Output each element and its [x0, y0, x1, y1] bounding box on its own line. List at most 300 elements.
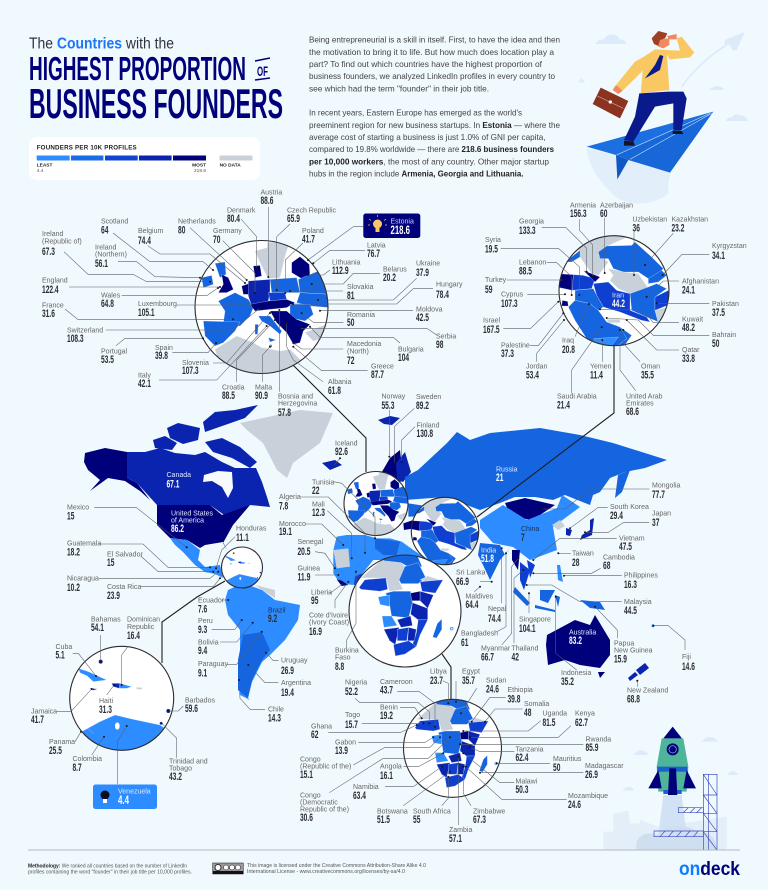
label: Liberia: Liberia	[311, 590, 332, 596]
exhaust	[658, 795, 687, 835]
label: Cote d'Ivoire (Ivory Coast)	[309, 612, 349, 638]
label: Maldives: 64.4	[466, 599, 479, 611]
label: Singapore: Singapore	[519, 616, 551, 624]
label: Albania	[328, 379, 351, 397]
label: Greece: 87.7	[371, 369, 384, 381]
label: Palestine: 37.3	[501, 348, 514, 360]
intro text: see which had the term "founder" in their job title.	[309, 84, 489, 94]
label: Bangladesh	[461, 630, 498, 649]
label: Cyprus	[501, 292, 524, 310]
label: Syria: 19.5	[485, 244, 498, 256]
footer rule	[28, 850, 740, 851]
label: Jamaica: Jamaica	[31, 708, 57, 716]
label: Ukraine: 37.9	[416, 267, 429, 279]
label: Uganda: 81.5	[542, 717, 555, 729]
label: Sweden: Sweden	[416, 394, 441, 401]
label: Maldives: Maldives	[466, 594, 494, 600]
label: China: 7	[521, 532, 525, 544]
illustration: rocket launch	[603, 727, 738, 850]
label: Croatia: 88.5	[222, 390, 235, 402]
label: Senegal	[298, 539, 324, 558]
title: The Countries with the	[29, 36, 174, 52]
label: Belarus	[383, 266, 407, 284]
clouds	[623, 737, 738, 791]
trousers	[624, 92, 687, 142]
label: Italy: Italy	[138, 372, 151, 380]
label: France	[42, 302, 64, 320]
small lens: Middle East	[410, 496, 482, 569]
label: Ethiopia	[508, 687, 533, 706]
label: Colombia: Colombia	[72, 756, 102, 763]
label: Cameroon: 43.7	[380, 684, 393, 696]
label: India	[481, 548, 496, 565]
label: Nepal	[488, 606, 507, 625]
label: Pakistan: Pakistan	[712, 301, 739, 308]
label: Mexico: 15	[67, 510, 74, 522]
label: Pakistan	[712, 301, 739, 319]
label: Trinidad and Tobago: 43.2	[169, 771, 182, 783]
label: Paraguay: 9.1	[198, 668, 207, 680]
connectors between lenses	[162, 345, 614, 699]
label: Fiji	[682, 654, 695, 673]
label: Morocco: Morocco	[279, 521, 306, 528]
label: Namibia	[353, 784, 379, 802]
label: Wales	[101, 292, 121, 310]
label: Sudan: 24.6	[486, 684, 499, 696]
label: Angola	[380, 764, 402, 782]
label: Dominican Republic: 16.4	[127, 630, 140, 642]
label: Tanzania: Tanzania	[516, 746, 544, 754]
legend card: 218.6	[194, 168, 206, 174]
label: Fiji: Fiji	[682, 654, 691, 661]
label: Turkey: Turkey	[485, 277, 507, 284]
label: Denmark: Denmark	[227, 208, 256, 214]
label: Nigeria	[345, 680, 367, 698]
label: Lithuania: 112.9	[332, 265, 349, 277]
label: Bolivia: Bolivia	[198, 640, 219, 646]
label: Bangladesh: 61	[461, 637, 468, 649]
icon: briefcase	[593, 88, 628, 118]
label: Kyrgyzstan: 34.1	[712, 250, 725, 262]
label: Norway	[382, 394, 406, 412]
paper plane	[587, 112, 713, 179]
label: Turkey: 59	[485, 284, 492, 296]
label: Cuba: 5.1	[56, 650, 65, 662]
label: Latvia: Latvia	[367, 242, 386, 250]
label: Mexico	[67, 504, 89, 522]
label: Mozambique	[568, 793, 608, 811]
label: Lebanon: Lebanon	[519, 260, 546, 266]
label: Israel	[483, 318, 501, 336]
methodology note	[28, 864, 192, 876]
label: Poland: Poland	[302, 228, 324, 235]
label: Trinidad and Tobago: Tobago	[169, 766, 192, 772]
intro text: compared to 19.8% worldwide — there are 218.6 business founders	[309, 144, 554, 154]
label: United Arab Emirates	[626, 394, 663, 418]
label: Greece	[371, 364, 394, 381]
label: Jamaica	[31, 708, 57, 726]
label: Qatar: Qatar	[682, 347, 700, 354]
label: Algeria: Algeria	[279, 494, 301, 501]
label: Namibia: Namibia	[353, 784, 379, 791]
label: Russia: Russia	[496, 466, 518, 474]
label: Germany: Germany	[213, 228, 242, 235]
intro text	[309, 34, 560, 178]
label: Kenya	[575, 710, 595, 729]
label: Jamaica: 41.7	[31, 714, 44, 726]
label: Sweden	[416, 394, 441, 412]
label: Tunisia: Tunisia	[312, 480, 334, 486]
label: Papua New Guinea: Papua	[614, 640, 634, 648]
label: United States of America	[171, 510, 214, 535]
label: Lebanon: 88.5	[519, 266, 532, 278]
label: Netherlands	[178, 218, 216, 237]
intro text: average cost of starting a business is just 1.0% of GNI per capita,	[309, 132, 546, 142]
label: Czech Republic	[287, 208, 337, 225]
label: Serbia	[436, 334, 456, 351]
label: Argentina: 19.4	[281, 687, 294, 699]
label: Kyrgyzstan: Kyrgyzstan	[712, 243, 747, 250]
label: Poland	[302, 228, 324, 246]
label: Ghana	[311, 724, 332, 741]
label: Moldova	[416, 306, 443, 324]
label: Benin: Benin	[380, 704, 398, 712]
label: Jordan: Jordan	[526, 364, 548, 370]
label: Oman: 35.5	[641, 370, 654, 382]
label: Switzerland: 108.3	[67, 333, 84, 345]
small lens: Europe	[344, 472, 409, 537]
label: Uruguay: 26.9	[281, 665, 294, 677]
label: Algeria: 7.8	[279, 500, 288, 512]
license text: This image is licensed under the Creative Commons Attribution-Share Alike 4.0	[247, 863, 426, 869]
label: Iraq: 20.8	[562, 344, 575, 356]
label: Papua New Guinea	[614, 640, 653, 666]
label: Kazakhstan: Kazakhstan	[672, 216, 708, 224]
Greenland	[240, 410, 333, 478]
label: Serbia: 98	[436, 339, 443, 351]
icon: light bulb	[368, 215, 387, 232]
label: Indonesia: 35.2	[561, 676, 574, 688]
lens: Africa	[404, 698, 502, 797]
title: HIGHEST PROPORTION	[29, 51, 246, 88]
label: Georgia: Georgia	[519, 218, 544, 226]
label: Armenia: 156.3	[570, 208, 587, 220]
legend card: MOST	[192, 162, 206, 168]
label: Togo: Togo	[345, 712, 360, 719]
label: Scotland: Scotland	[101, 218, 128, 226]
label: Ireland (Northern): (Northern)	[95, 252, 127, 258]
label: Qatar: 33.8	[682, 353, 695, 365]
label: Lebanon	[519, 260, 546, 278]
South East Asia	[512, 550, 605, 612]
label: Slovakia	[347, 284, 374, 302]
label: Afghanistan: 24.1	[682, 285, 695, 297]
title	[29, 36, 283, 127]
label: Guatemala: Guatemala	[67, 540, 101, 548]
label: Ukraine: Ukraine	[416, 260, 440, 268]
label: South Korea: South Korea	[610, 504, 649, 511]
label: Cote d'Ivoire (Ivory Coast): 16.9	[309, 626, 322, 638]
label: Nicaragua: 10.2	[67, 582, 80, 594]
label: Ireland (Northern)	[95, 244, 127, 270]
label: United States of America: 86.2	[171, 523, 184, 535]
label: Chile: Chile	[268, 706, 284, 714]
label: Congo (Democratic Republic of the): Congo	[300, 792, 321, 800]
label: Zimbabwe	[473, 808, 505, 826]
intro text: the motivation to bring it to life. But how much does location play a	[309, 47, 554, 57]
methodology note: profiles containing the word "founder" in their job title per 10,000 profiles.	[28, 870, 192, 876]
label: Myanmar	[481, 646, 511, 664]
Japan	[580, 518, 594, 540]
label: Congo (Democratic Republic of the): 30.6	[300, 812, 313, 824]
label: Madagascar: Madagascar	[585, 763, 624, 770]
icon: light bulb	[100, 790, 110, 803]
label: Slovenia: Slovenia	[182, 360, 209, 367]
label: Congo (Democratic Republic of the): Republic of the)	[300, 806, 349, 814]
label: Guinea: Guinea	[298, 566, 320, 572]
label: Russia: 21	[496, 472, 503, 484]
Koreas	[552, 520, 572, 536]
label: Indonesia: Indonesia	[561, 670, 591, 677]
city skyline	[603, 811, 727, 850]
label: Nicaragua	[67, 576, 99, 594]
label: Uruguay	[281, 658, 308, 677]
label: Cyprus: Cyprus	[501, 292, 524, 298]
label: El Salvador: 15	[107, 557, 114, 569]
label: Thailand	[512, 646, 538, 664]
label: Israel: 167.5	[483, 324, 500, 336]
label: Nicaragua: Nicaragua	[67, 576, 99, 582]
label: Slovenia: 107.3	[182, 365, 199, 377]
label: Myanmar: 66.7	[481, 652, 494, 664]
label: Latvia	[367, 242, 386, 260]
label: El Salvador	[107, 552, 143, 569]
label: Taiwan: Taiwan	[572, 550, 594, 558]
label: Bahamas	[91, 616, 121, 634]
label: Cuba: Cuba	[56, 644, 72, 651]
intro text: hubs in the region include Armenia, Georgia and Lithuania.	[309, 168, 524, 178]
label: Macedonia (North): 72	[347, 355, 354, 367]
label: Fiji: 14.6	[682, 661, 695, 673]
label: Azerbaijan: 60	[600, 208, 607, 220]
label: Bahrain: Bahrain	[712, 332, 736, 339]
label: Papua New Guinea: 15.9	[614, 654, 627, 666]
label: Bangladesh: Bangladesh	[461, 630, 498, 638]
label: Italy: 42.1	[138, 378, 151, 390]
label: South Korea: 29.4	[610, 510, 623, 522]
hair	[652, 31, 667, 46]
label: Palestine: Palestine	[501, 342, 530, 350]
label: Albania: 61.8	[328, 385, 341, 397]
legend card: 4.4	[37, 168, 44, 174]
label: Egypt	[462, 668, 480, 687]
label: Barbados: Barbados	[185, 698, 215, 704]
label: Philippines	[624, 572, 658, 591]
label: Iran	[612, 292, 625, 310]
label: Guinea: 11.9	[298, 572, 310, 584]
label: Finland: 130.8	[416, 428, 433, 440]
label: Portugal	[101, 348, 128, 366]
label: Brazil: 9.2	[268, 613, 277, 625]
label: Botswana: Botswana	[377, 808, 408, 816]
label: Macedonia (North): Macedonia	[347, 341, 381, 348]
label: Sri Lanka: 66.9	[456, 576, 469, 588]
label: Macedonia (North)	[347, 341, 381, 367]
label: Bosnia and Herzegovina: 57.8	[278, 407, 291, 419]
label: Libya: 23.7	[430, 675, 443, 687]
label: South Africa	[413, 808, 451, 826]
label: Yemen: Yemen	[590, 364, 612, 370]
label: Saudi Arabia: 21.4	[557, 400, 570, 412]
label: Cote d'Ivoire (Ivory Coast): Cote d'Ivoire	[309, 612, 348, 620]
label: Cambodia: 68	[603, 560, 610, 572]
label: Oman	[641, 364, 660, 382]
shirt and arms	[616, 37, 694, 93]
label: Denmark: 80.4	[227, 213, 240, 225]
label: Myanmar: Myanmar	[481, 646, 511, 652]
label: Georgia: 133.3	[519, 225, 536, 237]
label: Sweden: 89.2	[416, 400, 429, 412]
label: Madagascar: 26.9	[585, 769, 598, 781]
label: Zambia: 57.1	[449, 833, 462, 845]
label: Malta: 90.9	[255, 390, 268, 402]
label: Palestine	[501, 342, 530, 360]
label: Australia: 83.2	[569, 635, 582, 647]
label: Pakistan: 37.5	[712, 307, 725, 319]
label: Turkey	[485, 277, 507, 296]
icon: Creative Commons badge	[213, 863, 243, 874]
label: South Africa: 55	[413, 814, 420, 826]
label: Taiwan: 28	[572, 557, 579, 569]
label: Czech Republic: 65.9	[287, 213, 300, 225]
label: Zimbabwe: 67.3	[473, 814, 486, 826]
label: Kuwait: 48.2	[682, 322, 695, 334]
label: Mauritius: Mauritius	[553, 756, 582, 763]
leader lines	[57, 207, 709, 825]
label: Togo: 15.7	[345, 719, 358, 731]
methodology note: Methodology: We ranked all countries based on the number of LinkedIn	[28, 864, 187, 870]
label: Colombia: 8.7	[72, 762, 82, 774]
label: Spain: Spain	[155, 345, 173, 352]
label: Malaysia	[624, 599, 652, 617]
label: Peru: 9.3	[198, 624, 207, 636]
label: Somalia: Somalia	[524, 701, 549, 708]
label: Luxembourg: 105.1	[138, 307, 155, 319]
label: Paraguay: Paraguay	[198, 661, 228, 668]
label: China	[521, 526, 539, 544]
label: Costa Rica	[107, 584, 141, 602]
label: Guatemala	[67, 540, 101, 558]
label: Spain: 39.8	[155, 350, 168, 362]
label: El Salvador: El Salvador	[107, 552, 143, 558]
label: Iran: Iran	[612, 292, 624, 300]
label: Algeria	[279, 494, 301, 512]
label: Senegal: Senegal	[298, 539, 324, 546]
label: Netherlands: 80	[178, 225, 185, 237]
label: Kyrgyzstan	[712, 243, 747, 262]
label: Congo (Republic of the): 15.1	[300, 769, 313, 781]
label: Burkina Faso: 8.8	[335, 661, 344, 673]
label: Poland: 41.7	[302, 234, 315, 246]
label: New Zealand: 68.8	[627, 694, 640, 706]
label: Saudi Arabia	[557, 394, 597, 412]
label: Hungary: 78.4	[436, 289, 449, 301]
label: Uzbekistan: Uzbekistan	[632, 216, 667, 224]
Scandinavia and Svalbard	[378, 416, 411, 490]
label: Congo (Democratic Republic of the): (Democratic	[300, 800, 338, 806]
label: Dominican Republic	[127, 616, 160, 642]
label: Finland	[416, 422, 440, 440]
label: Azerbaijan	[600, 202, 633, 220]
label: Norway: Norway	[382, 394, 406, 400]
legend card: FOUNDERS PER 10K PROFILES	[37, 144, 137, 151]
label: Bulgaria: 104	[398, 352, 410, 364]
label: Greece: Greece	[371, 364, 394, 370]
label: Syria	[485, 237, 501, 256]
label: Benin: 19.2	[380, 710, 393, 722]
label: New Zealand	[627, 688, 668, 706]
label: Kuwait: Kuwait	[682, 316, 703, 324]
launch tower	[654, 774, 717, 850]
lens: Europe	[195, 240, 330, 376]
label: Bahamas: 54.1	[91, 622, 104, 634]
Mongolia	[505, 498, 555, 520]
label: Uzbekistan: 36	[632, 222, 640, 234]
label: Dominican Republic: Republic	[127, 624, 155, 631]
label: Albania: Albania	[328, 379, 351, 386]
label: Romania: Romania	[347, 312, 375, 319]
license text: International License - www.creativecommons.org/licenses/by-sa/4.0	[247, 869, 405, 875]
label: Iran: 44.2	[612, 298, 625, 310]
label: Trinidad and Tobago	[169, 758, 208, 783]
Russia	[405, 428, 667, 510]
label: Dominican Republic: Dominican	[127, 616, 160, 624]
label: Cameroon: Cameroon	[380, 679, 413, 686]
label: Hungary	[436, 282, 463, 301]
label: Syria: Syria	[485, 237, 501, 244]
label: Croatia: Croatia	[222, 384, 245, 392]
label: England	[42, 278, 68, 296]
small lens: Africa	[349, 553, 461, 667]
label: Malawi	[516, 778, 538, 796]
label: Hungary: Hungary	[436, 282, 463, 288]
label: Congo (Republic of the): (Republic of the)	[300, 764, 351, 770]
label: Czech Republic: Czech Republic	[287, 208, 337, 214]
label: Sri Lanka: Sri Lanka	[456, 570, 486, 576]
label: Taiwan	[572, 550, 594, 569]
label: Spain	[155, 345, 173, 362]
label: Bahrain: 50	[712, 338, 719, 350]
label: England: 122.4	[42, 284, 59, 296]
legend card	[29, 137, 260, 180]
label: Bolivia	[198, 640, 219, 657]
label: Ireland (Republic of): 67.3	[42, 246, 55, 258]
labels: Middle East and Central Asia	[483, 202, 747, 418]
label: Tunisia: 22	[312, 485, 319, 497]
legend card: NO DATA	[220, 162, 241, 168]
label: Madagascar	[585, 763, 624, 781]
label: Wales: 64.8	[101, 298, 114, 310]
label: Botswana: 51.5	[377, 814, 390, 826]
hands and head	[613, 34, 677, 94]
label: Ireland (Republic of): (Republic of)	[42, 238, 82, 246]
label: Honduras	[236, 526, 267, 544]
label: Ghana: Ghana	[311, 724, 332, 730]
label: Macedonia (North): (North)	[347, 348, 369, 356]
label: Oman: Oman	[641, 364, 660, 370]
intro text: preeminent region for new business startups. In Estonia — where the	[309, 120, 560, 130]
label: Moldova: 42.5	[416, 312, 429, 324]
